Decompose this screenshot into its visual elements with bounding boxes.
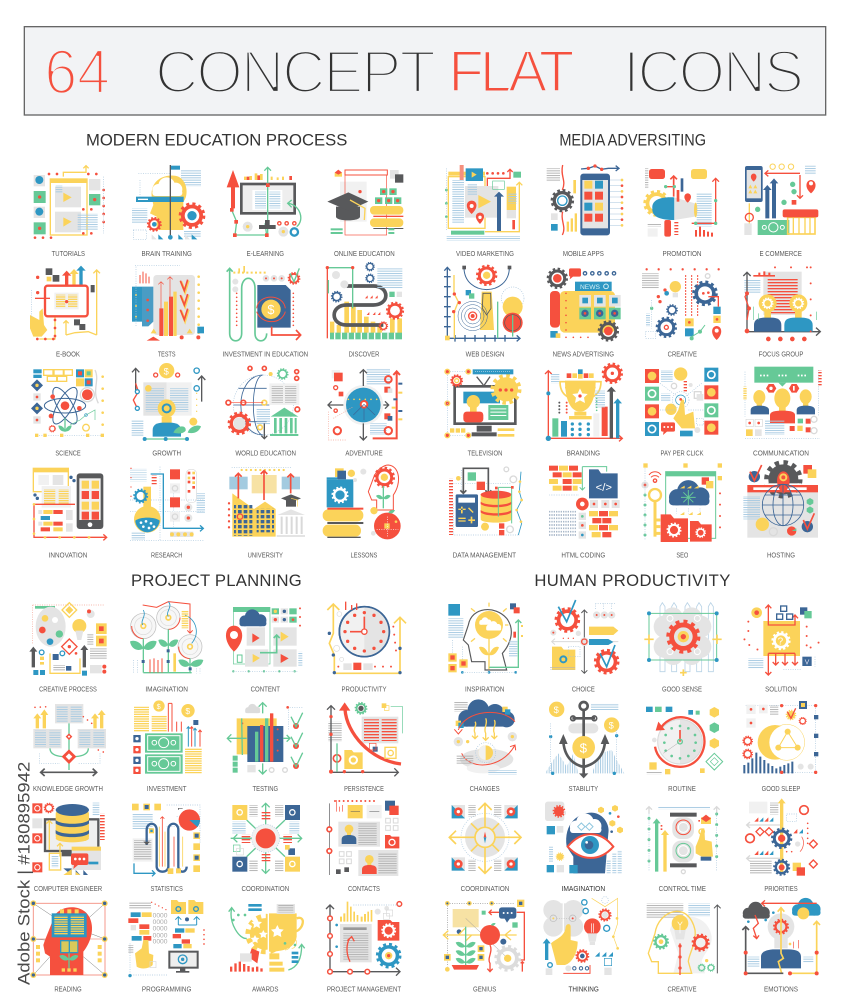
label: DATA MANAGEMENT [453,550,516,559]
icon: video marketing [446,165,522,258]
icon: emotions [742,898,821,994]
icon: world education [226,366,300,457]
icon: e-book [30,266,100,359]
label: E-BOOK [56,350,81,359]
icon: programming: 0000 [153,938,168,945]
icon: creative [642,269,721,359]
label: PRODUCTIVITY [342,684,386,693]
label: DISCOVER [349,350,380,359]
icon: investment in education [222,266,308,359]
icon: genius [443,900,524,994]
label: PAY PER CLICK [660,448,704,457]
label: CREATIVE [668,985,696,994]
icon: online education [327,170,403,258]
label: E-LEARNING [247,249,284,258]
title word flat: FLAT [448,40,574,105]
label: PROMOTION [662,249,702,258]
icon: statistics [132,804,200,893]
icon: thinking [543,897,619,994]
panel: modern education process icons rows 3-4 [31,363,402,559]
icon: creative process [29,603,107,693]
label: EMOTIONS [764,985,798,994]
panel: media adversiting icons rows 3-4 [445,364,822,559]
icon: testing [227,703,303,793]
icon: programming: 0000 [153,926,168,933]
icon: promotion [645,168,719,258]
label: CHOICE [572,684,595,693]
label: CREATIVE PROCESS [39,684,97,693]
label: PROJECT MANAGEMENT [327,985,401,994]
icon: seo [641,463,722,559]
icon: good sleep [743,701,818,793]
label: STABILITY [568,784,598,793]
icon: investment [133,700,202,793]
label: BRAIN TRAINING [142,249,192,258]
label: CHANGES [470,784,500,793]
label: PROGRAMMING [142,985,192,994]
panel: media adversiting icons rows 1-2 [444,164,820,359]
panel: modern education process icons rows 1-2 [30,165,403,359]
icon: news advertising: NEWS [580,284,601,291]
icon: brain training [132,165,204,258]
label: COMPUTER ENGINEER [34,884,103,893]
icon: computer engineer [32,803,105,893]
label: UNIVERSITY [248,550,283,559]
icon: tests [132,266,204,359]
label: GROWTH [152,448,181,457]
icon: tutorials [34,166,104,258]
label: GOOD SENSE [662,684,702,693]
vertical stock watermark text: Adobe Stock | #180895942 [14,762,33,985]
icon: imagination [130,602,203,693]
section heading: human productivity: HUMAN PRODUCTIVITY [534,571,730,590]
icon: programming: 0000 [153,919,168,926]
section heading: project planning: PROJECT PLANNING [131,571,302,590]
label: PRIORITIES [764,884,798,893]
icon: coordination (compass) [449,803,521,893]
icon: university [229,467,305,559]
panel: human productivity icons [443,600,821,994]
icon: stability: $ [580,741,588,756]
title number 64: 64 [44,38,110,108]
icon: communication [743,367,822,457]
icon: html coding [549,466,620,559]
icon: imagination (eye) [545,802,623,893]
section heading: media adversiting: MEDIA ADVERSITING [559,130,706,149]
title word concept: CONCEPT [155,38,436,105]
icon: news advertising [548,268,621,359]
label: INSPIRATION [465,684,504,693]
label: GENIUS [473,985,496,994]
title banner [24,27,826,115]
label: READING [54,985,82,994]
icon: stability: $ [609,721,615,731]
label: E COMMERCE [760,249,802,258]
panel: project planning icons [29,602,406,994]
label: SOLUTION [765,684,797,693]
label: ADVENTURE [345,448,383,457]
icon: contacts [327,800,399,893]
label: TUTORIALS [52,249,85,258]
label: IMAGINATION [562,884,605,893]
label: CONTROL TIME [659,884,706,893]
icon: stability: $ [554,705,560,715]
label: INVESTMENT [147,784,187,793]
icon: productivity [327,602,406,693]
icon: choice [550,600,618,693]
icon: priorities [746,798,817,893]
icon: growth: $ [164,366,170,376]
label: COORDINATION [242,884,289,893]
label: STATISTICS [150,884,183,893]
icon: e commerce [744,164,818,258]
label: WEB DESIGN [466,350,504,359]
icon: data management [449,467,523,559]
label: FOCUS GROUP [759,350,803,359]
label: SCIENCE [55,448,81,457]
icon: programming [128,900,204,994]
label: LESSONS [351,550,377,559]
label: HTML CODING [561,550,605,559]
label: KNOWLEDGE GROWTH [33,784,103,793]
label: VIDEO MARKETING [456,249,514,258]
icon: research [130,467,205,559]
icon: mobile apps [547,164,622,258]
icon: coordination [231,803,302,893]
icon: content [226,607,302,693]
section heading: modern education process: MODERN EDUCATION PROCESS [86,130,347,149]
label: WORLD EDUCATION [235,448,296,457]
label: MOBILE APPS [563,249,604,258]
label: IMAGINATION [145,684,188,693]
label: GOOD SLEEP [762,784,800,793]
icon: programming: 0000 [153,912,168,919]
icon: growth [132,363,205,457]
icon: pay per click [645,367,718,457]
label: BRANDING [567,448,600,457]
label: NEWS ADVERTISING [553,350,614,359]
label: TESTS [158,350,176,359]
icon: html coding: </> [596,482,612,494]
icon: control time [646,806,720,893]
icon: branding [545,364,622,457]
icon: focus group [743,267,820,359]
icon: investment: $ [185,706,190,716]
icon: programming: 0000 [153,932,168,939]
icon: investment in education: $ [267,303,274,317]
label: CONTACTS [348,884,380,893]
label: COMMUNICATION [753,448,809,457]
icon: reading [30,900,108,994]
icon: knowledge growth [33,704,107,793]
title word icons: ICONS [623,38,804,105]
icon: e-learning [227,167,301,258]
icon: stability [545,702,624,793]
icon: science [31,369,104,457]
label: HOSTING [767,550,795,559]
icon: discover [326,262,403,359]
icon: lessons [323,465,401,559]
label: PERSISTENCE [344,784,384,793]
icon: innovation [33,468,107,559]
label: TELEVISION [468,448,502,457]
label: RESEARCH [151,550,182,559]
icon: adventure [328,368,402,457]
icon: solution [743,605,820,693]
label: ONLINE EDUCATION [334,249,395,258]
label: TESTING [252,784,278,793]
icon: hosting [743,463,818,559]
icon: inspiration [448,603,523,693]
icon: solution: ? [778,636,784,647]
label: INVESTMENT IN EDUCATION [222,350,308,359]
label: SEO [676,550,688,559]
icon: television [445,369,520,457]
label: COORDINATION [461,884,509,893]
label: CONTENT [251,684,280,693]
icon: changes [454,699,517,793]
icon: awards [229,904,305,994]
icon: project management [326,902,402,994]
label: CREATIVE [668,350,697,359]
icon: routine [646,707,723,793]
icon: investment: $ [157,702,161,711]
icon: creative (head and bulb) [647,903,721,994]
label: THINKING [568,985,599,994]
label: INNOVATION [49,550,87,559]
icon: good sense [644,603,722,693]
icon: persistence [327,702,403,793]
icon: web design [444,266,524,359]
label: AWARDS [252,985,279,994]
label: ROUTINE [668,784,696,793]
